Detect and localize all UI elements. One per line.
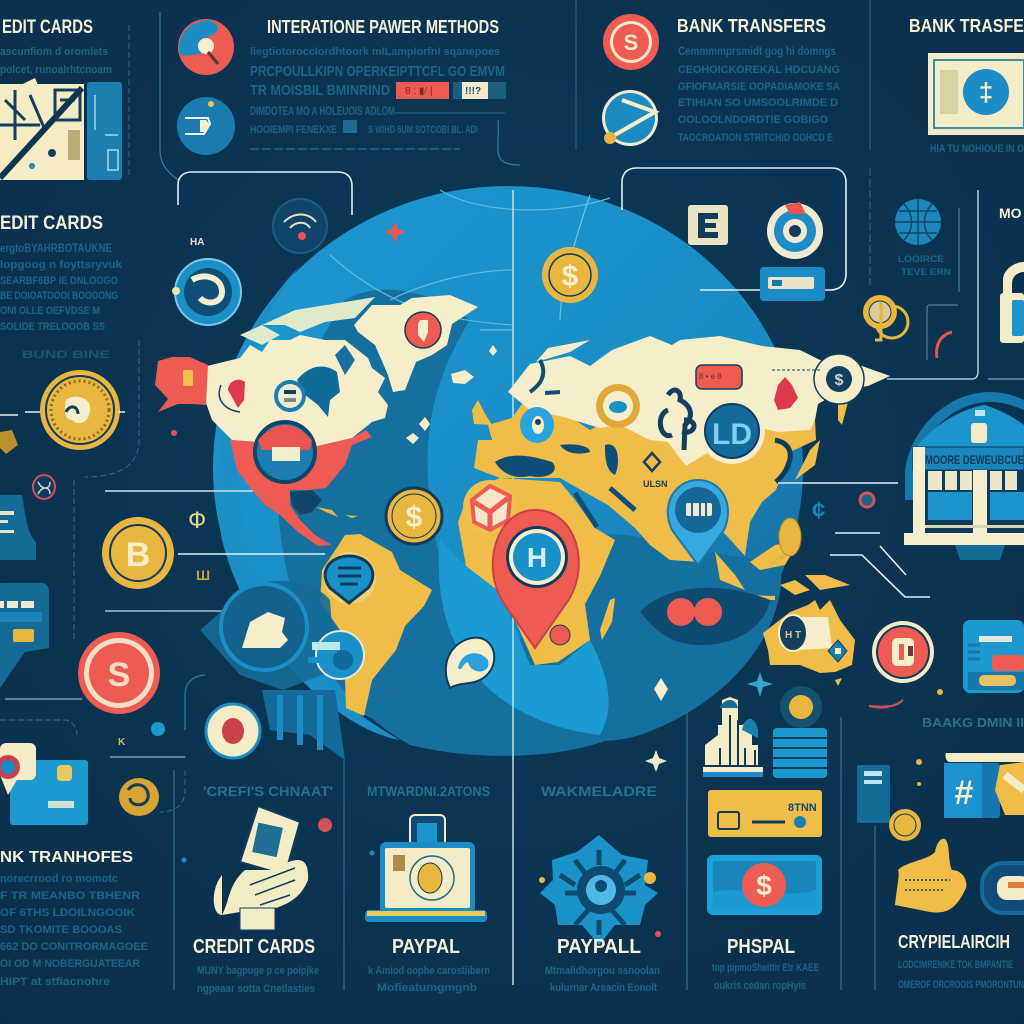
- marker: red heart oval: [640, 588, 770, 645]
- panel: column phspal: [707, 790, 822, 992]
- icon: blue credit card: [0, 583, 49, 688]
- marker: Greenland: [405, 312, 441, 348]
- icon: blue dot: [151, 722, 165, 736]
- description: [197, 965, 319, 995]
- description: SOLIDE TRELOOOB SS: [0, 321, 105, 333]
- marker: red figure: [774, 377, 798, 410]
- icon: gold coin: [119, 778, 159, 816]
- description: ascunfiom d oromlets: [0, 46, 108, 58]
- description: S WIHD 6UM SOTCOBI BL. ADI: [368, 124, 478, 136]
- decorative dots: [171, 430, 943, 883]
- marker: dark emblem: [660, 390, 694, 450]
- description: OOLOOLNDORDTIE GOBIGO: [678, 114, 828, 126]
- icon: blue card with dollar: [707, 855, 822, 915]
- icon: red oval badge: [206, 704, 260, 758]
- roof: [905, 392, 1024, 500]
- sign: [913, 447, 1024, 470]
- icon: gold bitcoin coin: [102, 517, 174, 589]
- description: BUND BINE: [22, 349, 110, 361]
- icon: gold bitcoin coin: B: [126, 536, 150, 574]
- panel: bottom-left bank transfers: [0, 507, 260, 988]
- marker: Asia large LD: LD: [712, 418, 752, 451]
- icon: gold mark: K: [118, 737, 126, 748]
- label: HA: [190, 237, 204, 248]
- panel: international payment methods: [177, 17, 506, 155]
- description: liegtiotoroccIordhtoork mILampIorfnI sqanepoes: [250, 46, 500, 58]
- Greenland: [354, 295, 478, 392]
- label: 'CREFI'S CHNAAT': [203, 783, 333, 799]
- Canada: [205, 335, 388, 446]
- South America: [320, 534, 432, 716]
- marker: Asia blue pin: [668, 480, 728, 565]
- description: Mofieatumgmgnb: [377, 982, 477, 994]
- Japan and islands: [795, 388, 852, 480]
- heading: NK TRANHOFES: [0, 849, 133, 866]
- description: [0, 241, 123, 361]
- icon: wifi badge: [273, 199, 327, 253]
- panel: column crypto: [857, 715, 1024, 991]
- icon: ring: [767, 202, 823, 259]
- description: PRCPOULLKIPN OPERKEIPTTCFL GO EMVM: [250, 63, 505, 80]
- marker: leaf: [770, 518, 801, 565]
- marker: gold ring: [596, 384, 640, 428]
- panel: credit cards top left: [0, 17, 122, 180]
- icon: small coin: [0, 430, 18, 454]
- heading: BANK TRANSFERS: [677, 16, 826, 36]
- panel: column paypal mandala: [540, 783, 661, 994]
- sparkle: bottom diamond: [654, 678, 668, 701]
- marker: speech bubble: [446, 638, 494, 688]
- marker: Australia emblem: H T: [785, 630, 801, 641]
- map: continents: [155, 295, 890, 716]
- icon: bank towers: [703, 697, 763, 777]
- icon: gold dollar coin: [542, 247, 598, 303]
- description: kulurnar Areacin Eonolt: [550, 982, 657, 994]
- icon: red coin: S: [624, 30, 638, 55]
- icon: laptop: [365, 815, 487, 922]
- icon: padlock: [1000, 262, 1024, 343]
- panel: mobile security: [863, 199, 1024, 358]
- marker: red tag: 8 • e 8: [699, 372, 722, 381]
- icon: blue card with dollar: $: [756, 870, 772, 901]
- description: [250, 46, 506, 149]
- Africa: [458, 478, 615, 665]
- description: norecrrood ro momotc: [0, 873, 118, 885]
- connectors right: [778, 483, 930, 597]
- marker: Africa red pin: H: [527, 542, 547, 573]
- panel: bank transfers: [602, 14, 840, 146]
- icon: gold coin: [863, 295, 908, 340]
- facade: [913, 470, 1024, 533]
- description: HIPT at stfiacnohre: [0, 976, 110, 988]
- description: ONI OLLE OEFVDSE M: [0, 305, 100, 317]
- description: !!!?: [465, 86, 481, 97]
- icon: coin red left: S: [108, 656, 130, 694]
- label: Asia small: ULSN: [643, 479, 668, 489]
- icon: yellow card: 8TNN: [788, 802, 817, 814]
- heading: PAYPALL: [557, 936, 641, 958]
- description: Mtmalidhorgou ssnoolan: [545, 965, 660, 977]
- marker: Australia emblem: [779, 615, 807, 651]
- description: [0, 46, 112, 76]
- Alaska: [155, 357, 208, 412]
- Eurasia yellow: [474, 380, 816, 562]
- marker: Africa red pin: [493, 510, 579, 648]
- sparkle: blue star: [747, 672, 773, 697]
- marker: hand badge: [200, 581, 345, 760]
- icon: robot: [0, 475, 55, 560]
- marker: Canada blue: [276, 382, 304, 410]
- description: ergtoBYAHRBOTAUKNE: [0, 241, 112, 255]
- Southeast Asia islands: [715, 540, 850, 600]
- icon: blue globe: [177, 97, 235, 155]
- icon: blue compass: [602, 90, 658, 146]
- description: Cemmmmprsmidt gog hi domngs: [678, 44, 836, 58]
- description: ETIHIAN SO UMSOOLRIMDE D: [678, 97, 838, 109]
- description: OF 6THS LDOILNGOOIK: [0, 907, 135, 919]
- description: [678, 44, 840, 144]
- marker: diamond Asia: [644, 453, 660, 471]
- icon: card: [760, 267, 825, 301]
- description: CEOHOICKOREKAL HDCUANG: [678, 64, 840, 76]
- panel: tools box top right: [622, 168, 846, 301]
- description: 8 : ▮/ |: [405, 86, 433, 97]
- globe: [213, 186, 803, 985]
- description: DIMDOTEA MO A HOLEUOIS ADLOM: [250, 104, 395, 118]
- icon: small yellow symbol: Ф: [188, 507, 206, 534]
- icon: E tile: [688, 205, 728, 245]
- marker: Australia diamond: [828, 640, 847, 662]
- Madagascar: [600, 598, 615, 640]
- icon: coin stack: [773, 686, 827, 778]
- panel: left credit cards: [0, 213, 125, 688]
- marker: Europe eye: [520, 407, 554, 443]
- marker: dollar coin Atlantic: [386, 488, 442, 544]
- heading: PAYPAL: [392, 936, 460, 958]
- icon: yellow card: [708, 790, 822, 837]
- marker: USA lens: [255, 422, 315, 482]
- connector lines top: [178, 172, 352, 215]
- marker: black dollar: [814, 354, 864, 404]
- icon: red coin right: [872, 621, 934, 683]
- icon: server: [857, 765, 890, 823]
- description: [712, 962, 819, 992]
- icon: gold dollar coin: $: [562, 260, 579, 293]
- icon: thumbs up: [895, 839, 966, 913]
- description: [545, 965, 660, 994]
- label: WAKMELADRE: [541, 783, 657, 799]
- description: GFIOFMARSIE OOPADIAMOKE SA: [678, 81, 840, 93]
- label: MTWARDNI.2ATONS: [367, 783, 490, 799]
- icon: hand with money: [214, 806, 332, 930]
- Iceland: [451, 370, 474, 384]
- Australia: [763, 600, 855, 673]
- British Isles: [472, 400, 492, 425]
- description: ngpeaar sotta Cnetlasties: [197, 983, 315, 995]
- description: top pipmoSheittir Etr KAEE: [712, 962, 819, 974]
- description: oukris cedan ropHyis: [714, 980, 806, 992]
- description: MUNY bagpuge p ce poipjke: [197, 965, 319, 977]
- description: [0, 873, 148, 988]
- heading: INTERATIONE PAWER METHODS: [267, 17, 499, 37]
- icon: blue swirl coin: [172, 259, 241, 325]
- Eurasia cream: [508, 336, 890, 466]
- panel: bank transfer note: [909, 16, 1024, 155]
- icon: small red swoosh: [869, 700, 903, 708]
- description: k Amiod oophe carostiibern: [368, 965, 490, 977]
- icon: blue card with tag: [963, 620, 1024, 693]
- map markers: [200, 312, 864, 760]
- sparkle: gold: [645, 750, 667, 772]
- icon: card and circuit: [0, 78, 122, 180]
- panel: column paypal laptop: [365, 783, 490, 994]
- Caribbean: [316, 507, 358, 518]
- heading: MO: [999, 205, 1022, 221]
- description: F TR MEANBO TBHENR: [0, 890, 140, 902]
- icon: hand and tile: #: [955, 774, 974, 812]
- icon: banknote: ‡: [979, 77, 993, 107]
- description: SEARBF6BP IE DNLOOGO: [0, 275, 118, 287]
- description: 662 DO CONITRORMAGOEE: [0, 941, 148, 953]
- United States and Central America: [230, 430, 372, 546]
- icon: dollar sign right: ¢: [812, 497, 825, 524]
- panel: bank building: [904, 392, 1024, 560]
- description: TR MOISBIL BMINRIND: [250, 82, 390, 99]
- marker: Canada red: [219, 380, 245, 412]
- description: [898, 959, 1024, 991]
- icon: speech card: [0, 743, 88, 825]
- marker: black dollar: $: [835, 372, 844, 389]
- icon: small gold symbol: Ш: [196, 567, 210, 583]
- heading: CREDIT CARDS: [193, 936, 315, 958]
- icon: red blue globe: [178, 19, 234, 75]
- description: SD TKOMITE BOOOAS: [0, 924, 122, 936]
- marker: South America blue coin: [308, 631, 364, 679]
- description: HOOIEMPI FENEKXE: [250, 124, 337, 136]
- description: [368, 965, 490, 994]
- icon: red star: [384, 222, 406, 243]
- description: polcet, runoalrhtcnoam: [0, 64, 112, 76]
- icon: small gold coin: [889, 809, 921, 841]
- description: TAOCROATION STRITCHID OOHCD E: [678, 132, 833, 144]
- marker: Africa red box: [463, 480, 517, 534]
- icon: gold coin: [40, 370, 120, 450]
- marker: red tag: [696, 365, 742, 389]
- heading: EDIT CARDS: [2, 17, 93, 38]
- label: [898, 254, 951, 277]
- marker: dollar coin Atlantic: $: [406, 501, 423, 534]
- icon: globe: [895, 199, 941, 245]
- icon: mandala: [540, 835, 658, 945]
- marker: South America pin: [324, 552, 376, 604]
- icon: coin red left: [78, 632, 160, 714]
- description: BE DOIOATOOOI BOOOONG: [0, 290, 118, 302]
- panel: column credit cards: [193, 783, 333, 995]
- seas: [495, 444, 618, 477]
- description: OI OD M NOBERGUATEEAR: [0, 958, 140, 970]
- icon: hand and tile: [944, 753, 1024, 818]
- marker: Asia large LD: [699, 398, 765, 464]
- sparkles: [406, 345, 497, 444]
- icon: red target: [860, 493, 874, 507]
- label: BAAKG DMIN II: [922, 715, 1024, 730]
- label: TEVE ERN: [901, 267, 951, 277]
- icon: red coin: [603, 14, 659, 70]
- icon: toggle: [982, 863, 1024, 913]
- description: lopgoog n foyttsryvuk: [0, 259, 123, 271]
- heading: EDIT CARDS: [0, 213, 103, 234]
- label: LOOIRCE: [898, 254, 944, 264]
- heading: PHSPAL: [727, 936, 795, 958]
